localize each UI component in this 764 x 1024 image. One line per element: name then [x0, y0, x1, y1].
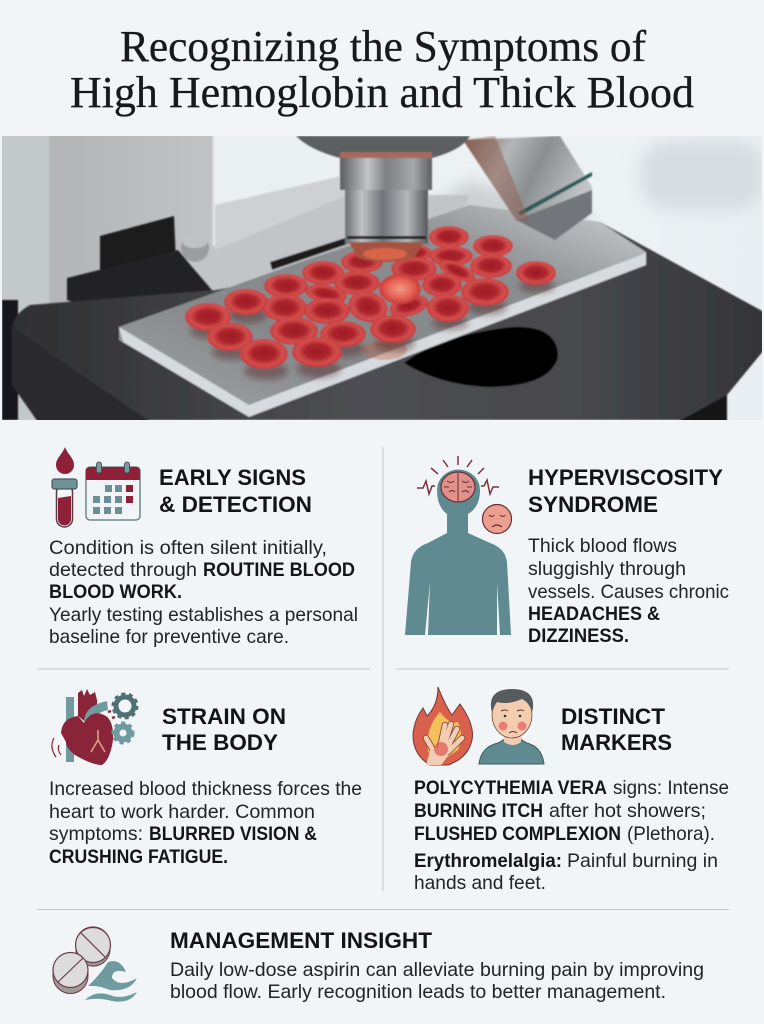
icon: burning hand: [413, 687, 472, 765]
panel: management insight: [53, 927, 704, 1003]
text: hyperviscosity body: vessels. Causes chronic: [528, 581, 729, 603]
panel: strain on the body: [49, 689, 362, 868]
heading: early signs: EARLY SIGNS: [159, 465, 306, 490]
text: distinct markers body: (Plethora).: [627, 823, 715, 845]
icon: heart with gears: [52, 689, 137, 765]
dividers: [37, 447, 729, 910]
text: management body: blood flow. Early recognition leads to better management.: [170, 981, 666, 1003]
text: distinct markers body: signs: Intense: [613, 777, 729, 799]
text: hyperviscosity body: HEADACHES &: [528, 604, 660, 625]
text: early signs body: ROUTINE BLOOD: [203, 560, 355, 581]
dark block: [99, 215, 176, 270]
objective lens, main: [296, 136, 470, 158]
heading: hyperviscosity: HYPERVISCOSITY: [528, 465, 723, 490]
text: early signs body: Condition is often silent initially,: [49, 537, 327, 559]
red blood cells: [185, 226, 556, 369]
text: management body: Daily low-dose aspirin can alleviate burning pain by improving: [170, 959, 704, 981]
text: distinct markers body: POLYCYTHEMIA VERA: [414, 778, 607, 799]
text: early signs body: [49, 537, 358, 648]
icon: aspirin pills and wave: [53, 927, 137, 1002]
heading: strain: [162, 704, 286, 755]
microscope platform: [12, 222, 764, 420]
text: early signs body: detected through: [49, 559, 197, 581]
lens glow under slide: [363, 340, 407, 360]
title: Recognizing the Symptoms of: [120, 22, 646, 71]
panel: distinct markers: [413, 687, 729, 894]
icon: calendar: [86, 462, 140, 520]
text: distinct markers body: after hot showers;: [549, 800, 706, 822]
stage opening: [404, 327, 558, 387]
text: management body: [170, 959, 704, 1003]
text: early signs body: Yearly testing establishes a personal: [49, 604, 358, 626]
heading: early signs: & DETECTION: [159, 492, 312, 517]
title: High Hemoglobin and Thick Blood: [70, 68, 694, 117]
icon: person with headache: [405, 456, 512, 635]
text: strain body: symptoms:: [49, 823, 143, 845]
text: distinct markers body: hands and feet.: [414, 872, 546, 894]
title: [70, 22, 694, 117]
text: strain body: BLURRED VISION &: [149, 824, 317, 845]
heading: strain: STRAIN ON: [162, 704, 286, 729]
cell shadows: [190, 279, 555, 380]
heading: hyperviscosity: SYNDROME: [528, 492, 658, 517]
objective lens, angled: [464, 136, 592, 220]
heading: management insight: MANAGEMENT INSIGHT: [170, 928, 432, 953]
glass slide: [119, 205, 646, 415]
text: distinct markers body: Erythromelalgia:: [414, 851, 562, 872]
text: early signs body: BLOOD WORK.: [49, 582, 182, 603]
heading: strain: THE BODY: [162, 730, 278, 755]
panel: early signs and detection: [49, 447, 358, 648]
icon: person with flushed face: [479, 689, 544, 764]
knob: [180, 242, 210, 262]
text: hyperviscosity body: [528, 535, 729, 647]
text: hyperviscosity body: sluggishly through: [528, 558, 686, 580]
stage metal piece: [170, 195, 470, 292]
heading: distinct markers: DISTINCT: [561, 704, 665, 729]
text: distinct markers body: Painful burning in: [567, 850, 718, 872]
text: early signs body: baseline for preventive care.: [49, 626, 289, 648]
text: hyperviscosity body: Thick blood flows: [528, 535, 677, 557]
heading: distinct markers: MARKERS: [561, 730, 672, 755]
text: distinct markers body: [414, 777, 729, 894]
text: distinct markers body: FLUSHED COMPLEXION: [414, 824, 621, 845]
panel: hyperviscosity syndrome: [405, 456, 729, 647]
heading: distinct markers: [561, 704, 672, 755]
text: strain body: heart to work harder. Common: [49, 801, 315, 823]
text: strain body: CRUSHING FATIGUE.: [49, 847, 228, 868]
heading: early signs: [159, 465, 312, 517]
text: strain body: [49, 778, 362, 868]
icon: blood drop and test tube: [52, 447, 77, 527]
text: distinct markers body: BURNING ITCH: [414, 801, 543, 822]
hero photo: microscope with red blood cells on a slide: [2, 136, 764, 425]
text: strain body: Increased blood thickness forces the: [49, 778, 362, 800]
heading: hyperviscosity: [528, 465, 723, 517]
text: hyperviscosity body: DIZZINESS.: [528, 626, 629, 647]
